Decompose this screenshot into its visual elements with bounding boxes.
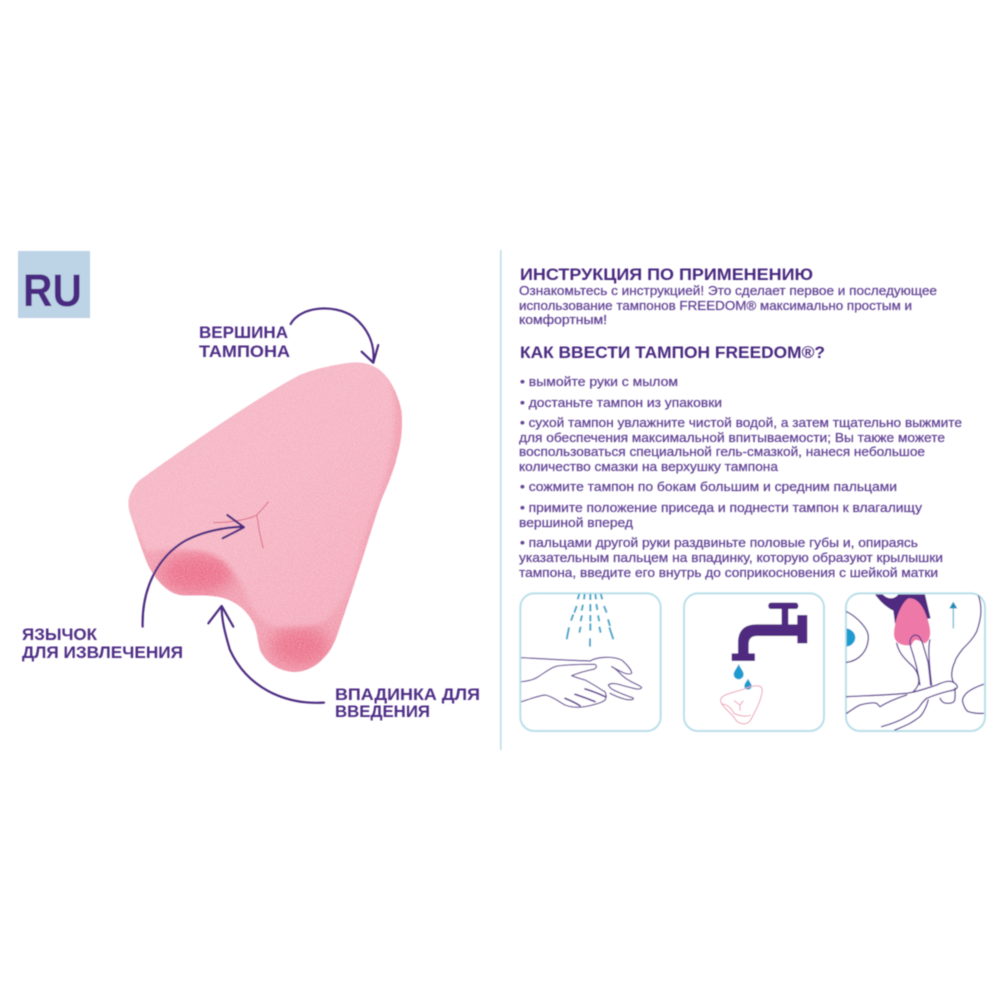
icon: anatomy and tampon xyxy=(847,594,983,730)
arrow to tampon apex xyxy=(291,308,378,363)
heading: how to insert: КАК ВВЕСТИ ТАМПОН FREEDOM®? xyxy=(520,343,825,362)
icon: faucet xyxy=(732,603,807,661)
slit on sponge xyxy=(213,502,268,548)
column divider xyxy=(500,250,502,750)
icon: upward arrow xyxy=(949,602,957,628)
label: removal tab xyxy=(22,625,183,662)
bullet list of steps: для обеспечения максимальной впитываемости; Вы также можете xyxy=(519,431,945,445)
arrow to removal tab xyxy=(143,515,244,627)
bullet list of steps: • пальцами другой руки раздвиньте половые губы и, опираясь xyxy=(520,536,918,550)
bullet list of steps: • достаньте тампон из упаковки xyxy=(520,396,722,410)
bullet list of steps: вершиной вперед xyxy=(519,516,634,530)
bullet list of steps xyxy=(519,375,962,580)
panel: washing hands xyxy=(520,593,661,731)
bullet list of steps: • сожмите тампон по бокам большим и средним пальцами xyxy=(520,480,897,494)
arrow to insertion recess xyxy=(208,606,324,703)
intro text: Ознакомьтесь с инструкцией! Это сделает первое и последующее xyxy=(519,284,937,298)
label: insertion recess: ВПАДИНКА ДЛЯ xyxy=(335,685,480,704)
language badge: RU: RU xyxy=(23,265,82,316)
bullet list of steps: воспользоваться специальной гель-смазкой, нанеся небольшое xyxy=(519,445,925,459)
label: removal tab: ЯЗЫЧОК xyxy=(22,625,98,644)
intro text: использование тампонов FREEDOM® максимально простым и xyxy=(519,299,912,313)
icon: hands xyxy=(522,657,642,707)
sponge tampon illustration xyxy=(122,357,407,677)
bullet list of steps: количество смазки на верхушку тампона xyxy=(519,460,778,474)
panel: rinsing tampon under tap xyxy=(684,593,824,731)
bullet list of steps: тампона, введите его внутрь до соприкосновения с шейкой матки xyxy=(519,566,938,580)
bullet list of steps: • сухой тампон увлажните чистой водой, а затем тщательно выжмите xyxy=(520,416,962,430)
bullet list of steps: • вымойте руки с мылом xyxy=(520,375,678,389)
bullet list of steps: • примите положение приседа и поднести тампон к влагалищу xyxy=(520,501,923,515)
label: tampon apex xyxy=(199,323,290,361)
icon: water drops xyxy=(734,664,752,690)
panel: inserting tampon xyxy=(846,593,985,731)
intro text xyxy=(519,284,937,327)
label: insertion recess: ВВЕДЕНИЯ xyxy=(335,702,430,721)
icon: water spray xyxy=(567,594,613,647)
label: insertion recess xyxy=(335,685,480,721)
heading: instructions: ИНСТРУКЦИЯ ПО ПРИМЕНЕНИЮ xyxy=(520,265,813,284)
intro text: комфортным! xyxy=(519,313,607,327)
icon: tampon outline xyxy=(721,686,762,724)
label: tampon apex: ВЕРШИНА xyxy=(199,323,288,342)
label: removal tab: ДЛЯ ИЗВЛЕЧЕНИЯ xyxy=(22,643,183,662)
bullet list of steps: указательным пальцем на впадинку, которую образуют крылышки xyxy=(519,551,943,565)
language badge: RU xyxy=(18,251,90,318)
label: tampon apex: ТАМПОНА xyxy=(199,342,290,361)
